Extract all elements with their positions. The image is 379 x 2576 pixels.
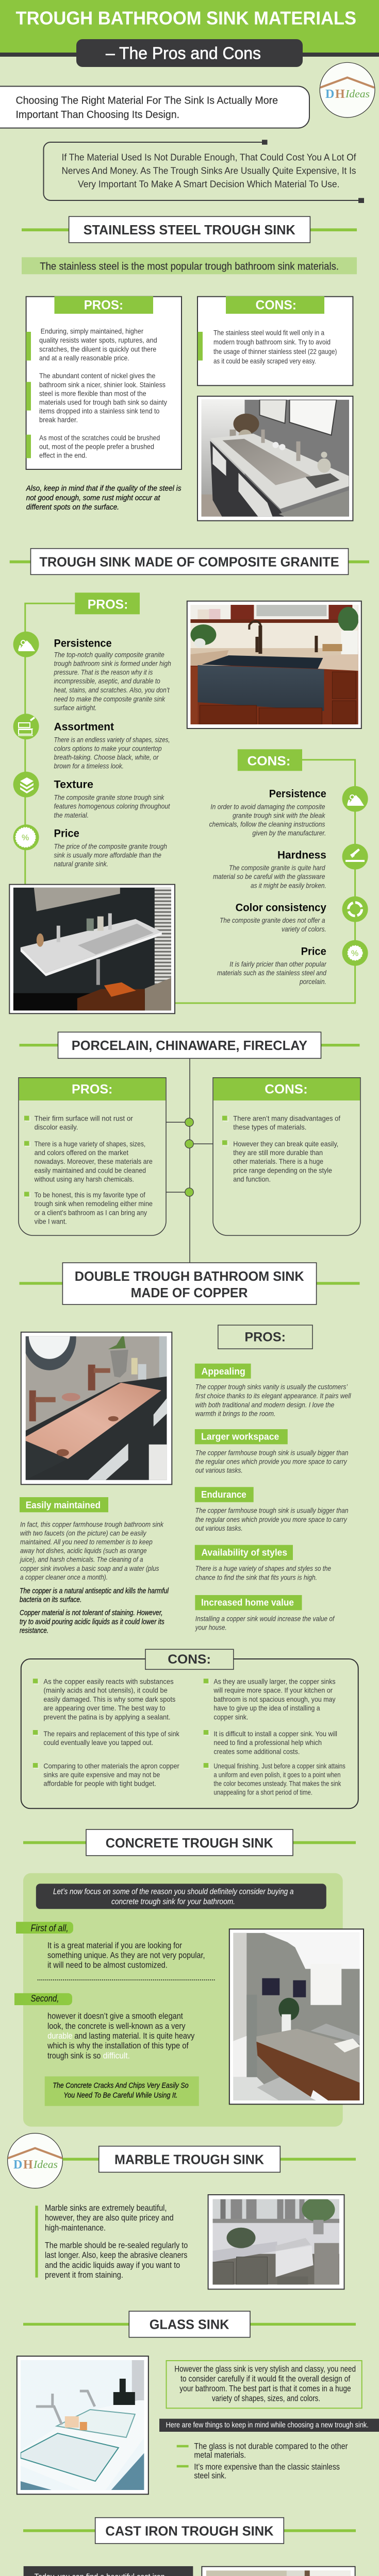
copper pro: appealing: Appealing — [201, 1366, 245, 1377]
panel: composite granite pros timeline: heat, stains, and scratches. Also, you don’t — [54, 686, 170, 694]
panel: stainless cons: CONS: — [256, 298, 296, 313]
photo: stainless trough sink — [197, 396, 353, 521]
panel: stainless pros: scratches, the diluent is quickly out there — [39, 345, 156, 353]
panel: copper cons: the color becomes unsteady. That makes the sink — [213, 1780, 341, 1788]
copper pro: easily maintained: resistance. — [20, 1626, 48, 1635]
heading: double copper sink: MADE OF COPPER — [131, 1285, 248, 1300]
panel: composite granite pros timeline: Texture — [54, 778, 93, 790]
marble text: and the acidic liquids away if you want to — [45, 2261, 180, 2270]
panel: copper cons: As they are usually larger, the copper sinks — [213, 1677, 336, 1686]
panel: composite granite pros timeline: There is an endless variety of shapes, sizes, — [54, 736, 170, 744]
panel: porcelain pros: without using any harsh chemicals. — [34, 1175, 134, 1183]
second reason text — [47, 2012, 195, 2060]
panel: porcelain pros: Their firm surface will not rust or — [35, 1114, 133, 1122]
marble text: however, they are also quite pricey and — [45, 2213, 174, 2223]
second reason text: look, the concrete is well-known as a very — [47, 2022, 186, 2031]
marble text — [35, 2204, 188, 2280]
panel: composite granite pros timeline: PROS: — [88, 598, 128, 612]
panel: copper cons: The repairs and replacement of this type of sink — [43, 1730, 180, 1738]
copper pro: increased home value: Installing a copper sink would increase the value of — [195, 1615, 335, 1623]
first reason text: It is a great material if you are looking for — [47, 1941, 182, 1951]
photo: white double faucet sink — [9, 885, 175, 1013]
panel: copper cons: easily damaged. This is why some dark spots — [43, 1695, 175, 1703]
panel: composite granite cons timeline: materials such as the stainless steel and — [217, 969, 327, 977]
panel: stainless pros: materials used for trough bath sink so dainty — [39, 398, 167, 406]
header banner — [0, 0, 379, 67]
intro white box — [0, 87, 309, 128]
heading: composite granite — [10, 549, 369, 574]
copper pros label: PROS: — [244, 1330, 286, 1344]
first of all tag — [16, 1922, 73, 1934]
first reason text: it will need to be almost customized. — [47, 1961, 168, 1970]
copper pro: easily maintained: maintained. All you need to remember is to keep — [20, 1538, 153, 1546]
panel: stainless pros: and at a really reasonable price. — [39, 353, 129, 362]
copper pro: larger workspace: out various tasks. — [195, 1466, 243, 1475]
panel: composite granite cons timeline: Price — [301, 945, 326, 957]
panel: porcelain pros — [19, 1078, 166, 1235]
steel quality note: Also, keep in mind that if the quality of the steel is — [26, 485, 182, 493]
panel: stainless pros: The abundant content of nickel gives the — [39, 371, 156, 380]
panel: stainless pros: Enduring, simply maintained, higher — [41, 327, 143, 335]
copper pros label — [218, 1325, 312, 1349]
panel: composite granite pros timeline: incompressible, aseptic, and durable to — [54, 677, 160, 685]
concrete intro bar — [36, 1884, 326, 1909]
photo: cast iron sink — [202, 2567, 355, 2576]
panel: stainless pros: bathroom sink a nicer, shinier look. Stainless — [39, 380, 166, 388]
panel: composite granite pros timeline: Price — [54, 828, 79, 840]
first reason text: something unique. As they are not very popular, — [47, 1951, 205, 1960]
panel: copper cons: a uniform and even polish, it goes to a point when — [213, 1770, 340, 1778]
panel: stainless pros: PROS: — [84, 298, 123, 313]
marble text: Marble sinks are extremely beautiful, — [45, 2204, 167, 2213]
glass description box — [166, 2361, 362, 2408]
copper pro: appealing: warmth it brings to the room. — [195, 1409, 275, 1417]
panel: porcelain pros: and colors offered on the market — [35, 1148, 128, 1157]
panel: composite granite cons timeline: porcelain. — [299, 977, 326, 986]
heading: glass — [23, 2311, 356, 2337]
panel: composite granite cons timeline: variety of colors. — [282, 925, 326, 933]
panel: composite granite cons timeline: It is fairly pricier than other popular — [229, 960, 327, 968]
marble text: The marble should be re-sealed regularly to — [45, 2241, 188, 2250]
panel: stainless cons: the usage of thinner stainless steel (22 gauge) — [213, 347, 337, 355]
subtitle: – The Pros and Cons — [106, 43, 261, 62]
panel: porcelain cons: they are still more durable than — [233, 1148, 323, 1157]
panel: composite granite pros timeline: surface airtight. — [54, 703, 97, 711]
copper pro: availability of styles: There is a huge variety of shapes and styles so the — [195, 1564, 331, 1572]
second tag: Second, — [31, 1993, 59, 2004]
panel: composite granite cons timeline: granite trough sink with the bleak — [233, 811, 325, 820]
icon: price — [13, 824, 39, 850]
copper pro: appealing: first choice thanks to its elegant appearance. It pairs well — [195, 1392, 351, 1400]
marble text: last longer. Also, keep the abrasive cleaners — [45, 2251, 187, 2260]
panel: copper cons — [21, 1649, 358, 1808]
panel: copper cons: prevent the patina is by applying a sealant. — [43, 1713, 171, 1721]
first reason text — [47, 1941, 205, 1970]
callout: The Concrete Cracks And Chips Very Easily So — [53, 2082, 189, 2090]
icon: persistence mountain — [342, 786, 368, 812]
panel: copper cons: As the copper easily reacts with substances — [43, 1677, 174, 1686]
panel: copper cons: (mainly acids and hot utensils), it could be — [43, 1686, 168, 1694]
second reason text: however it doesn’t give a smooth elegant — [47, 2012, 183, 2021]
copper pro: easily maintained: away hot dishes, acidic liquids (such as orange — [20, 1547, 147, 1555]
panel: composite granite pros timeline: The composite granite stone trough sink — [54, 793, 164, 802]
intro bracket text: Very Important To Make A Smart Decision Which Material To Use. — [78, 178, 339, 189]
panel: porcelain cons — [213, 1078, 360, 1235]
panel: composite granite pros timeline: brown for a timeless look. — [54, 762, 124, 770]
copper pro: larger workspace: The copper farmhouse trough sink is usually bigger than — [195, 1448, 349, 1456]
copper pro: larger workspace: Larger workspace — [201, 1432, 279, 1442]
icon: texture — [13, 772, 39, 798]
panel: composite granite cons timeline: given by the manufacturer. — [252, 829, 326, 837]
intro bracket text: If The Material Used Is Not Durable Enough, That Could Cost You A Lot Of — [62, 152, 356, 163]
copper pro: increased home value — [195, 1595, 335, 1632]
icon: persistence mountain — [13, 632, 39, 657]
steel quality note: not good enough, some rust might occur at — [26, 494, 160, 502]
concrete intro bar: concrete trough sink for your bathroom. — [111, 1897, 235, 1906]
logo: H — [335, 88, 345, 101]
glass tips bar — [159, 2419, 379, 2432]
copper pro: easily maintained — [19, 1497, 169, 1635]
panel: copper cons: are appearing over time. The best way to — [43, 1704, 166, 1712]
panel: composite granite pros timeline: pressure. That is the reason why it is — [54, 668, 153, 676]
panel: composite granite pros timeline — [13, 592, 171, 885]
panel: composite granite pros timeline: trough bathroom sink is formed under high — [54, 659, 171, 668]
copper pro: availability of styles — [195, 1545, 331, 1581]
copper pro: endurance: Endurance — [201, 1489, 246, 1500]
glass tips list: steel sink. — [194, 2471, 226, 2480]
copper pro: easily maintained: Easily maintained — [26, 1500, 101, 1511]
panel: composite granite cons timeline: material so be careful with the glassware — [213, 872, 325, 880]
panel: composite granite pros timeline: colors options to make your countertop — [54, 744, 162, 753]
panel: copper cons: sinks are quite expensive and may not be — [43, 1770, 160, 1778]
panel: porcelain cons: and function. — [233, 1175, 271, 1183]
copper pro: easily maintained: Copper material is not tolerant of staining. However, — [20, 1609, 163, 1617]
steel quality note — [26, 485, 182, 512]
panel: stainless pros: items dropped into a stainless sink tend to — [39, 407, 160, 415]
panel: composite granite cons timeline: chemicals, follow the cleaning instructions — [209, 820, 325, 828]
callout: You Need To Be Careful While Using It. — [63, 2092, 177, 2100]
copper pro: endurance: the regular ones which provide you more space to carry — [195, 1515, 348, 1523]
photo: copper trough sink — [21, 1307, 172, 1484]
intro band: stainless: The stainless steel is the most popular trough bathroom sink materials. — [40, 261, 339, 272]
panel: stainless pros: out, most of the people prefer a brushed — [39, 443, 154, 451]
panel: porcelain pros: There is a huge variety of shapes, sizes, — [35, 1140, 145, 1148]
second reason text: difficult. — [103, 2051, 130, 2060]
callout — [45, 2076, 199, 2106]
panel: porcelain cons: However they can break quite easily, — [233, 1140, 338, 1148]
heading: double copper sink — [20, 1263, 360, 1304]
panel: composite granite pros timeline: Assortment — [54, 721, 114, 733]
heading: concrete: CONCRETE TROUGH SINK — [106, 1835, 273, 1851]
icon: hardness — [342, 844, 368, 870]
icon: assortment — [13, 714, 39, 739]
copper pro: increased home value: Increased home value — [201, 1598, 294, 1608]
intro bracket text — [43, 140, 364, 203]
panel: composite granite cons timeline: In order to avoid damaging the composite — [210, 802, 325, 810]
first of all tag: First of all, — [31, 1922, 69, 1933]
panel: stainless pros: As most of the scratches could be brushed — [39, 433, 160, 442]
copper pro: easily maintained: a copper cleaner once a month). — [20, 1573, 108, 1581]
panel: stainless pros — [26, 296, 182, 469]
copper pro: easily maintained: bacteria on its surface. — [20, 1596, 81, 1604]
copper pro: endurance — [195, 1487, 349, 1532]
panel: copper cons: need to find a professional help which — [213, 1738, 322, 1747]
copper pro: availability of styles: chance to find the sink that fits yours is high. — [195, 1573, 317, 1581]
panel: stainless cons: modern trough bathroom sink. Try to avoid — [213, 338, 331, 346]
copper pro: larger workspace: the regular ones which provide you more space to carry — [195, 1458, 348, 1466]
heading: cast iron: CAST IRON TROUGH SINK — [105, 2523, 274, 2538]
photo: composite granite farmhouse sink — [187, 601, 361, 728]
panel: stainless cons: The stainless steel would fit well only in a — [213, 328, 324, 336]
copper pro: easily maintained: with two faucets (on the picture) can be easily — [20, 1529, 146, 1537]
panel: porcelain cons: other materials. There is a huge — [233, 1157, 323, 1165]
copper pro: easily maintained: In fact, this copper farmhouse trough bathroom sink — [20, 1520, 164, 1528]
icon: price: % — [351, 949, 358, 958]
panel: composite granite cons timeline: CONS: — [248, 754, 290, 769]
panel: copper cons: Unequal finishing. Just before a copper sink attains — [213, 1761, 345, 1770]
panel: stainless pros: break harder. — [39, 416, 78, 424]
panel: composite granite cons timeline: The composite granite does not offer a — [220, 916, 325, 924]
panel: porcelain cons: price range depending on the style — [233, 1166, 332, 1174]
panel: porcelain pros: nowadays. Moreover, these materials are — [35, 1157, 153, 1165]
second tag — [14, 1993, 72, 2005]
panel: composite granite cons timeline: The composite granite is quite hard — [229, 863, 326, 872]
panel: composite granite cons timeline: Hardness — [277, 850, 326, 861]
logo: D — [325, 88, 334, 101]
panel: copper cons: copper sink. — [213, 1713, 248, 1721]
panel: composite granite cons timeline — [175, 749, 368, 1003]
logo — [8, 2133, 62, 2188]
panel: copper cons: It is difficult to install a copper sink. You will — [213, 1730, 337, 1738]
panel: cast iron text — [24, 2567, 193, 2576]
second reason text: and lasting material. It is quite heavy — [74, 2031, 195, 2041]
panel: composite granite pros timeline: natural granite sink. — [54, 860, 108, 868]
panel: porcelain pros: or a client’s bathroom as I can bring any — [35, 1208, 147, 1216]
heading: composite granite: TROUGH SINK MADE OF COMPOSITE GRANITE — [39, 554, 339, 570]
glass description box: variety of shapes, sizes, and colors. — [212, 2394, 320, 2403]
panel: stainless cons — [197, 296, 353, 385]
icon: price: % — [22, 834, 29, 842]
heading: concrete — [23, 1829, 356, 1856]
connector timeline — [166, 1058, 213, 1263]
heading: porcelain: PORCELAIN, CHINAWARE, FIRECLAY — [72, 1038, 307, 1053]
panel: copper cons: will require more space. If your kitchen or — [213, 1686, 333, 1694]
icon: color consistency — [342, 896, 368, 922]
panel: composite granite pros timeline: breath-taking. Choose black, white, or — [54, 753, 159, 761]
intro bracket text: Nerves And Money. As The Trough Sinks Are Usually Quite Expensive, It Is — [62, 165, 356, 176]
second reason text: which is why the installation of this type of — [47, 2041, 189, 2050]
logo: D — [13, 2158, 22, 2172]
marble text: high-maintenance. — [45, 2223, 106, 2232]
panel: porcelain pros: discolor easily. — [35, 1123, 78, 1131]
panel: copper cons: affordable for people with tight budget. — [43, 1780, 156, 1788]
copper pro: easily maintained: try to avoid pouring acidic liquids as it could lower its — [20, 1618, 164, 1626]
copper pro: easily maintained: juice), and harsh chemicals. The cleaning of a — [19, 1555, 143, 1564]
copper pro: easily maintained: copper sink involves a basic soap and a water (plus — [20, 1564, 159, 1572]
title: TROUGH BATHROOM SINK MATERIALS — [15, 8, 356, 29]
panel: porcelain pros: To be honest, this is my favorite type of — [35, 1191, 145, 1199]
logo: H — [23, 2158, 33, 2172]
panel: concrete — [14, 1873, 343, 2127]
panel: stainless pros: quality resists water spots, ruptures, and — [39, 336, 157, 344]
glass tips list: The glass is not durable compared to the other — [194, 2442, 348, 2451]
panel: stainless pros: effect in the end. — [39, 451, 87, 460]
copper pro: availability of styles: Availability of styles — [201, 1547, 287, 1557]
logo: Ideas — [345, 88, 370, 100]
panel: composite granite pros timeline: need to make the composite granite sink — [54, 694, 166, 703]
heading: marble — [62, 2146, 356, 2172]
panel: composite granite cons timeline: Color consistency — [236, 902, 326, 913]
panel: composite granite pros timeline: Persistence — [54, 637, 112, 649]
photo: marble kitchen sink — [208, 2195, 344, 2289]
panel: stainless cons: as it could be easily scraped very easy. — [213, 357, 316, 365]
heading: glass: GLASS SINK — [150, 2317, 229, 2332]
panel: copper cons: Comparing to other materials the apron copper — [43, 1761, 179, 1770]
panel: porcelain pros: easily maintained and could be cleaned — [35, 1166, 146, 1174]
panel: porcelain pros: vibe I want. — [35, 1217, 67, 1225]
heading: double copper sink: DOUBLE TROUGH BATHROOM SINK — [75, 1268, 304, 1284]
concrete intro bar: Let’s now focus on some of the reason you should definitely consider buying a — [53, 1888, 294, 1896]
panel: copper cons: creates some additional costs. — [213, 1747, 300, 1755]
panel: composite granite cons timeline: Persistence — [269, 788, 326, 800]
panel: stainless pros: steel is more flexible than most of the — [39, 389, 146, 397]
intro white box: Important Than Choosing Its Design. — [15, 109, 179, 121]
heading: stainless steel: STAINLESS STEEL TROUGH SINK — [84, 222, 295, 238]
panel: composite granite pros timeline: the material. — [54, 811, 89, 819]
copper pro: larger workspace — [195, 1429, 349, 1475]
glass tips list: metal materials. — [194, 2450, 246, 2460]
logo: Ideas — [33, 2158, 58, 2171]
photo: glass sink — [17, 2356, 149, 2494]
second reason text: durable — [47, 2031, 73, 2041]
panel: porcelain pros: trough sink when remodeling either mine — [35, 1199, 153, 1208]
second reason text: trough sink is so — [47, 2051, 101, 2060]
photo: concrete sink — [229, 1929, 364, 2104]
logo — [320, 62, 375, 117]
panel: composite granite cons timeline: as it might be easily broken. — [251, 881, 326, 889]
copper pro: appealing: with both traditional and modern design. I love the — [195, 1400, 334, 1409]
panel: copper cons: bathroom is not spacious enough, you may — [213, 1695, 336, 1703]
copper pro: appealing — [195, 1364, 351, 1417]
panel: porcelain pros: PROS: — [72, 1082, 112, 1097]
panel: composite granite pros timeline: The price of the composite granite trough — [54, 842, 167, 850]
marble text: prevent it from staining. — [45, 2270, 123, 2280]
panel: copper cons: unappealing for a short period of time. — [213, 1788, 312, 1797]
icon: price — [342, 940, 368, 966]
copper pro: endurance: The copper farmhouse trough sink is usually bigger than — [195, 1506, 349, 1515]
copper pro: increased home value: your house. — [195, 1623, 227, 1632]
panel: composite granite pros timeline: The top-notch quality composite granite — [54, 650, 164, 658]
heading: marble: MARBLE TROUGH SINK — [114, 2152, 264, 2167]
copper pro: easily maintained: The copper is a natural antiseptic and kills the harmful — [20, 1587, 169, 1595]
copper pro: appealing: The copper trough sinks vanity is usually the customers’ — [195, 1383, 348, 1391]
panel: copper cons: CONS: — [168, 1652, 211, 1667]
glass tips list — [177, 2442, 348, 2480]
heading: stainless steel — [22, 216, 357, 243]
panel: composite granite pros timeline: sink is usually more affordable than the — [54, 851, 161, 859]
panel: porcelain cons: these types of materials. — [233, 1123, 306, 1131]
heading: cast iron — [23, 2518, 356, 2544]
panel: porcelain cons: There aren’t many disadvantages of — [233, 1114, 340, 1122]
panel: copper cons: could eventually leave you tapped out. — [43, 1738, 153, 1747]
panel: copper cons: have to give up the idea of installing a — [213, 1704, 320, 1712]
glass description box: to consider carefully if it would fit the overall design of — [180, 2375, 351, 2384]
copper pro: endurance: out various tasks. — [195, 1524, 243, 1532]
panel: porcelain cons: CONS: — [265, 1082, 308, 1097]
intro band: stainless — [22, 257, 357, 274]
heading: porcelain — [20, 1032, 360, 1058]
steel quality note: different spots on the surface. — [26, 503, 119, 512]
intro white box: Choosing The Right Material For The Sink Is Actually More — [15, 95, 278, 107]
panel: composite granite pros timeline: features homogenous coloring throughout — [54, 802, 170, 810]
glass tips list: It’s more expensive than the classic stainless — [194, 2463, 340, 2472]
